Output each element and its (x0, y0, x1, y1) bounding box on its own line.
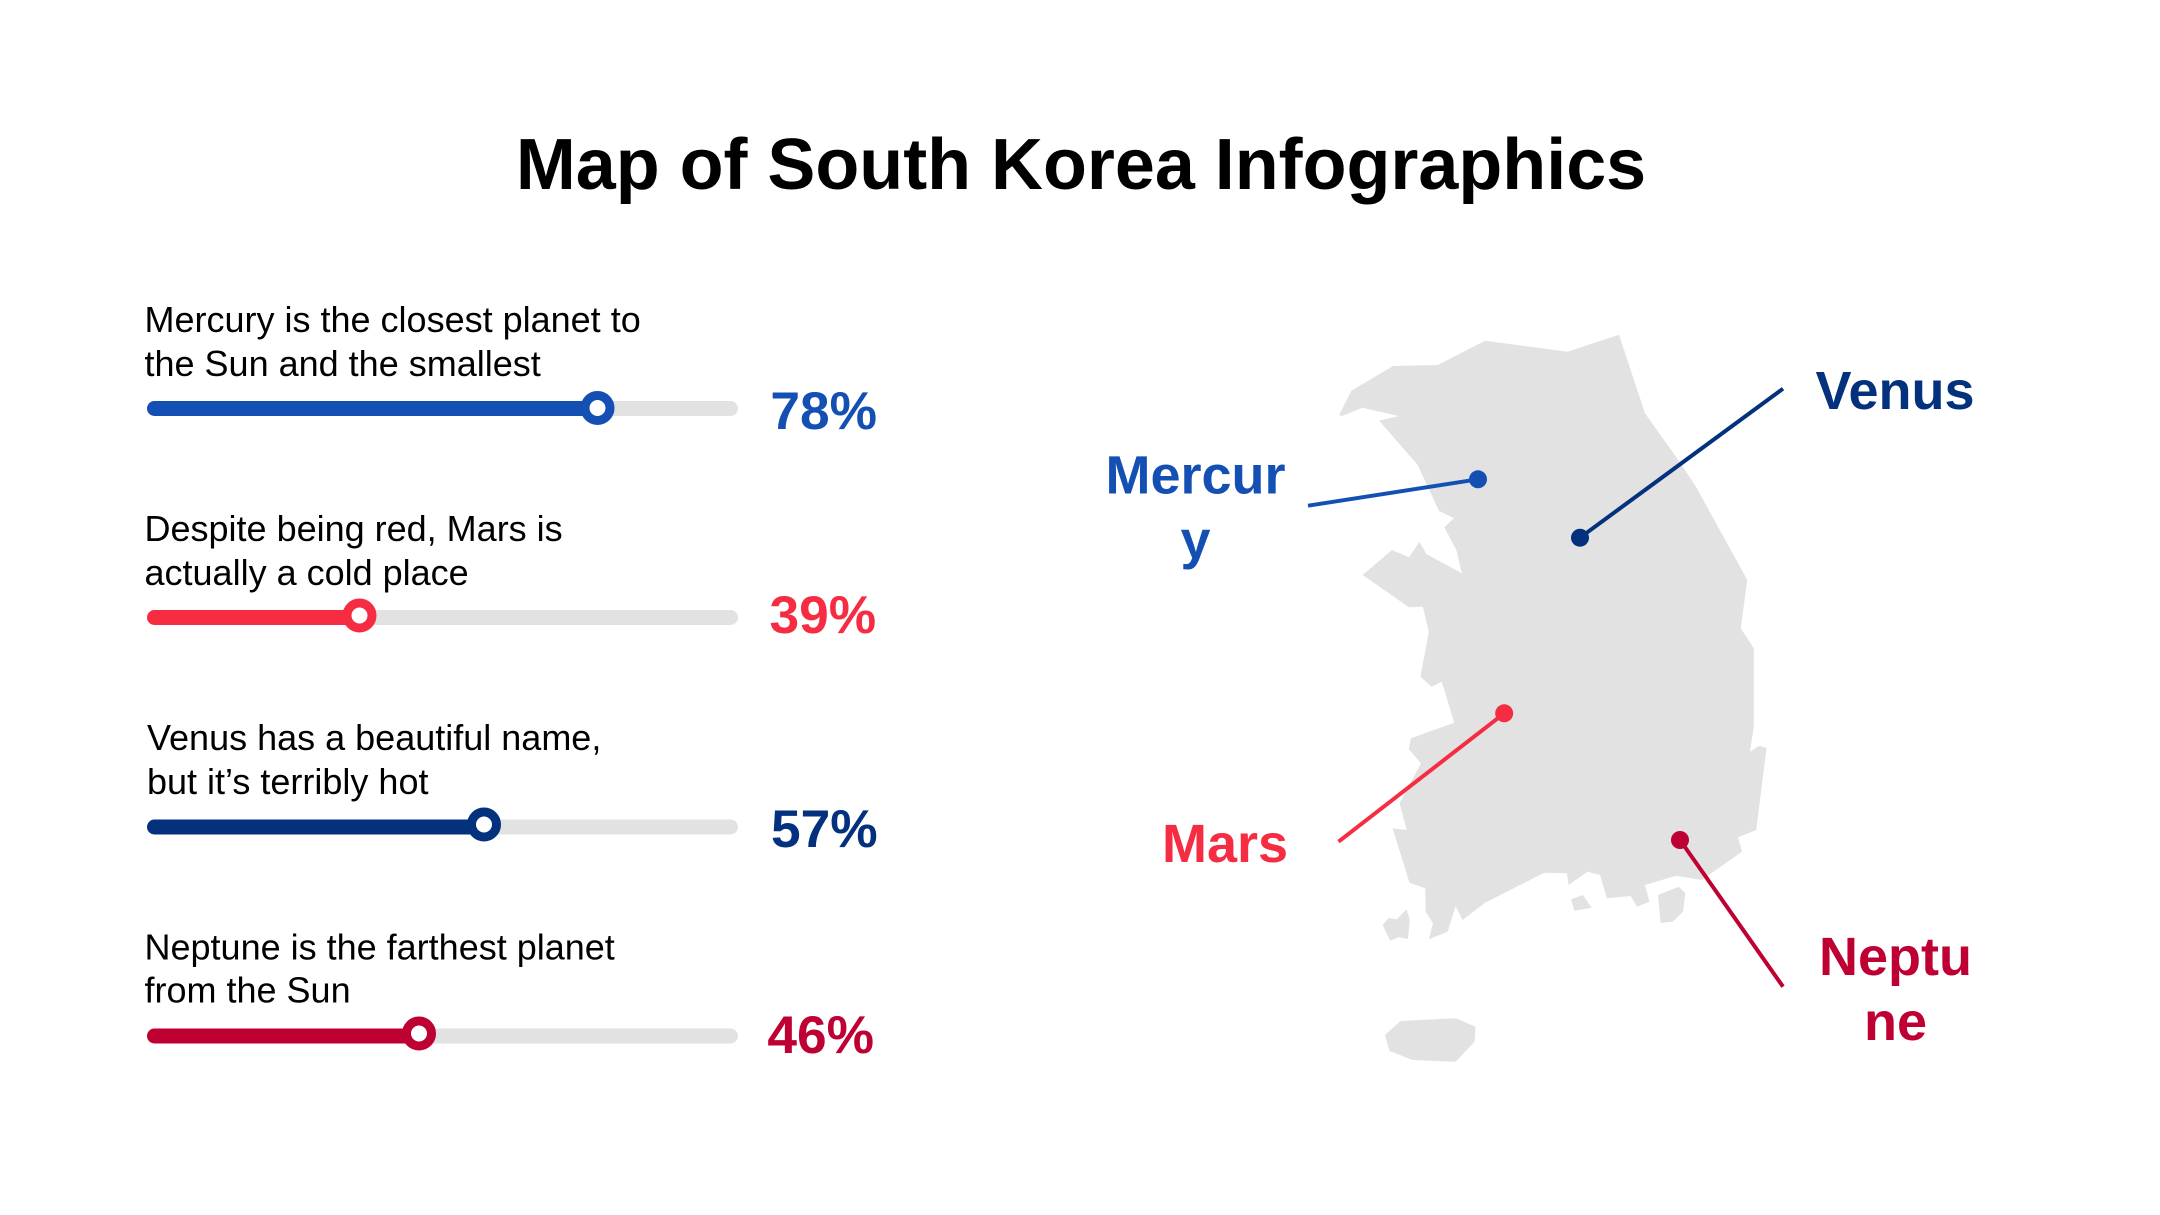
label: Mars: Mars (1162, 814, 1288, 874)
text: Mercury description: the Sun and the smallest (144, 343, 541, 384)
marker: Neptune (1671, 831, 1689, 849)
item: Mars (144, 508, 876, 645)
label: Mercury: y (1180, 510, 1211, 570)
slider: Neptune 46% (147, 1021, 738, 1046)
text: Venus description: Venus has a beautiful name, (147, 717, 601, 758)
text: Venus description: but it’s terribly hot (147, 761, 428, 802)
callout: Neptune (1671, 831, 1972, 1052)
slider: Mercury 78% (147, 396, 738, 420)
marker: Venus (1571, 529, 1589, 547)
slider: Venus 57% (147, 812, 738, 837)
text: Neptune description: from the Sun (144, 970, 351, 1010)
text: Mercury description: Mercury is the closest planet to (144, 299, 641, 340)
label: Neptune: ne (1864, 992, 1927, 1052)
item: Mercury (144, 299, 877, 441)
value: 57%: 57% (771, 800, 878, 859)
item: Neptune (144, 926, 874, 1065)
callout: Mercury (1105, 446, 1487, 570)
title: Map of South Korea Infographics (516, 125, 1646, 205)
map of South Korea (1339, 335, 1767, 1062)
leader line: Mars (1338, 713, 1504, 842)
callout: Venus (1571, 361, 1975, 547)
leader line: Neptune (1680, 840, 1783, 987)
item: Venus (147, 717, 878, 859)
text: Neptune description: Neptune is the farthest planet (144, 926, 615, 968)
value: 39%: 39% (770, 586, 876, 645)
slider: Mars 39% (147, 603, 738, 628)
label: Mercury: Mercur (1105, 446, 1286, 506)
label: Neptune: Neptu (1819, 927, 1972, 987)
text: Mars description: actually a cold place (144, 552, 469, 593)
panel: progress list (144, 299, 878, 1065)
value: 78%: 78% (770, 382, 877, 441)
value: 46%: 46% (767, 1006, 874, 1065)
text: Mars description: Despite being red, Mars is (144, 508, 563, 549)
marker: Mars (1495, 704, 1513, 722)
label: Venus: Venus (1815, 361, 1975, 421)
marker: Mercury (1469, 470, 1487, 488)
leader line: Venus (1580, 389, 1783, 538)
leader line: Mercury (1308, 479, 1478, 506)
callout: Mars (1162, 704, 1513, 874)
